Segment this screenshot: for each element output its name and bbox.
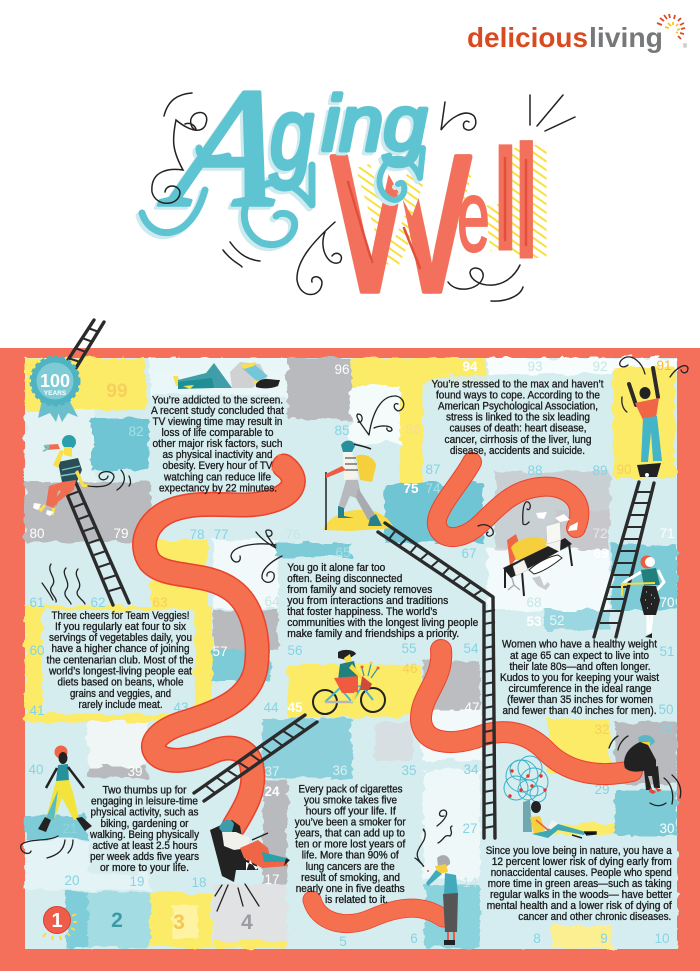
body text: leisure activity bbox=[89, 784, 199, 874]
body text: leisure activity: or more to your life. bbox=[100, 862, 189, 874]
body text: screen time: loss of life comparable to bbox=[162, 427, 274, 439]
body text: veggies: If you regularly eat four to six bbox=[55, 621, 187, 633]
space numbers: 44 bbox=[263, 700, 279, 715]
body text: veggies: servings of vegetables daily, you bbox=[49, 632, 192, 644]
swirls: lonely flourish near square 76 bbox=[231, 530, 282, 582]
swirls: wavy lines above veggies bbox=[42, 564, 85, 604]
space numbers: 37 bbox=[264, 764, 280, 779]
space numbers: 74 bbox=[425, 481, 441, 496]
logo: delicious living: living bbox=[589, 22, 663, 53]
space numbers: 61 bbox=[29, 595, 45, 610]
body text: leisure activity: per week adds five years bbox=[90, 851, 199, 863]
body text: stress: causes of death: heart disease, bbox=[450, 422, 586, 434]
space numbers: 78 bbox=[189, 527, 205, 542]
title swirls bbox=[152, 93, 575, 301]
space numbers: 21 bbox=[62, 821, 78, 836]
space numbers: 36 bbox=[332, 763, 348, 778]
title word: Well: W bbox=[331, 114, 471, 333]
space numbers: 69 bbox=[593, 546, 609, 561]
title word: Aging bbox=[142, 54, 427, 245]
body text: nature bbox=[486, 845, 673, 923]
body text: veggies: grains and veggies, and bbox=[70, 688, 171, 700]
body text: nature: regular walks in the woods— have better bbox=[490, 889, 672, 901]
space numbers bbox=[28, 358, 675, 949]
body text: going it alone: you from interactions and traditions bbox=[287, 595, 449, 607]
figure: person slumped at desk with papers bbox=[503, 512, 578, 596]
body text: stress: cancer, cirrhosis of the liver, lung bbox=[444, 434, 592, 446]
body text: going it alone bbox=[287, 562, 478, 640]
swirls: around person reaching bbox=[620, 357, 688, 412]
body text: screen time: other major risk factors, such bbox=[152, 438, 282, 450]
body text: veggies: world’s longest-living people eat bbox=[48, 666, 192, 678]
space numbers: 77 bbox=[213, 527, 229, 542]
space numbers: 85 bbox=[334, 423, 350, 438]
body text: smoking: Every pack of cigarettes bbox=[298, 784, 403, 796]
body text: veggies bbox=[46, 610, 194, 711]
space numbers: 91 bbox=[656, 358, 672, 373]
body text: stress: found ways to cope. According to the bbox=[436, 390, 600, 402]
space numbers: 17 bbox=[264, 872, 280, 887]
body text: going it alone: that foster happiness. The world’s bbox=[287, 606, 438, 618]
body text: nature: 12 percent lower risk of dying early from bbox=[492, 856, 672, 868]
space numbers: 94 bbox=[462, 359, 478, 374]
space numbers: 45 bbox=[287, 700, 303, 715]
body text: screen time: TV viewing time may result in bbox=[152, 416, 282, 428]
space numbers: 93 bbox=[527, 359, 543, 374]
body text: smoking: you’ve been a smoker for bbox=[295, 816, 406, 828]
body text: smoking: result of smoking, and bbox=[301, 872, 400, 884]
figure: woman with telescope bbox=[33, 435, 92, 516]
space numbers: 2 bbox=[111, 909, 123, 932]
space numbers: 56 bbox=[287, 643, 303, 658]
body text: leisure activity: active at least 2.5 hours bbox=[92, 840, 198, 852]
swirls: above desk bbox=[478, 502, 530, 536]
figure: sad man sitting bbox=[624, 735, 662, 794]
title word: Well: l bbox=[492, 118, 519, 281]
body text: going it alone: make family and friendships a priority. bbox=[287, 628, 459, 640]
space numbers: 96 bbox=[334, 362, 350, 377]
figure: woman reading under scribble tree bbox=[504, 756, 596, 838]
body text: leisure activity: Two thumbs up for bbox=[102, 784, 187, 796]
ladder: to 100 years bbox=[64, 320, 104, 368]
body text: nature: more time in green areas—such as taking bbox=[488, 878, 672, 890]
space numbers: 40 bbox=[28, 762, 44, 777]
swirls: below walking woman bbox=[21, 836, 73, 858]
body text: going it alone: from family and society removes bbox=[287, 584, 433, 596]
space numbers: 7 bbox=[468, 931, 476, 946]
ladder: squares 67 to 90 bbox=[594, 482, 654, 637]
swirls: smoke above old man bbox=[415, 810, 452, 866]
space numbers: 41 bbox=[29, 703, 45, 718]
body text: smoking: years, that can add up to bbox=[295, 828, 405, 840]
body text: smoking: you smoke takes five bbox=[304, 794, 397, 806]
pale text panel backings bbox=[42, 376, 676, 922]
title: Aging Well lettering bbox=[142, 54, 575, 333]
body text: waistline: (fewer than 35 inches for women bbox=[507, 694, 653, 706]
space numbers: 87 bbox=[425, 462, 441, 477]
space numbers: 50 bbox=[658, 702, 674, 717]
body text: screen time: expectancy by 22 minutes. bbox=[159, 482, 277, 494]
body text: smoking: nearly one in five deaths bbox=[296, 883, 405, 895]
logo: delicious living bbox=[467, 14, 688, 53]
space numbers: 90 bbox=[616, 462, 632, 477]
body text: screen time: You’re addicted to the screen. bbox=[152, 394, 283, 406]
space numbers: 52 bbox=[549, 613, 565, 628]
figure: woman walking with sun bbox=[38, 746, 92, 832]
body text: smoking: ten or more lost years of bbox=[295, 838, 406, 850]
body text: waistline: circumference in the ideal range bbox=[508, 683, 652, 695]
space numbers: 68 bbox=[526, 595, 542, 610]
space numbers: 30 bbox=[659, 821, 675, 836]
figure: woman with tape measure bbox=[622, 556, 664, 638]
space numbers: 6 bbox=[410, 931, 418, 946]
snake: smoking, squares 15 to 6 bbox=[312, 900, 443, 924]
body text: stress: stress is linked to the six leading bbox=[446, 412, 590, 424]
space numbers: 5 bbox=[339, 934, 347, 949]
space numbers: 54 bbox=[463, 641, 479, 656]
body text: going it alone: communities with the longest living people bbox=[287, 617, 478, 629]
body text: going it alone: often. Being disconnected bbox=[287, 573, 402, 585]
space numbers: 47 bbox=[464, 700, 480, 715]
body text: nature: mental health and a lower risk of dying of bbox=[487, 900, 673, 912]
space numbers: 53 bbox=[526, 614, 542, 629]
space numbers: 9 bbox=[600, 931, 608, 946]
swirl: wind near woman with telescope bbox=[88, 470, 130, 490]
space numbers: 3 bbox=[173, 911, 185, 934]
logo: delicious living: ® bbox=[683, 43, 688, 50]
space numbers: 35 bbox=[401, 763, 417, 778]
space numbers: 92 bbox=[592, 359, 608, 374]
body text: waistline: and fewer than 40 inches for men). bbox=[502, 705, 656, 717]
title word: Well: e bbox=[457, 159, 490, 273]
space numbers: 64 bbox=[264, 594, 280, 609]
body text: nature: Since you love being in nature, you have a bbox=[486, 845, 673, 857]
body text: veggies: the centenarian club. Most of the bbox=[46, 654, 194, 666]
title word: Aging: g bbox=[270, 79, 313, 190]
space numbers: 51 bbox=[659, 644, 675, 659]
space numbers: 63 bbox=[152, 595, 168, 610]
body text: veggies: have a higher chance of joining bbox=[52, 643, 190, 655]
figure: woman on bicycle bbox=[313, 650, 385, 714]
space numbers: 19 bbox=[129, 874, 145, 889]
ladder: long ladder from hiker down to square 27 bbox=[378, 523, 495, 838]
space numbers: 70 bbox=[659, 595, 675, 610]
swirls: around sad man bbox=[609, 736, 681, 806]
body text: smoking: lung cancers are the bbox=[306, 861, 395, 873]
body text: smoking: is related to it. bbox=[325, 894, 388, 906]
snake: waistline, squares 55 to 31 bbox=[421, 650, 632, 774]
space numbers: 57 bbox=[212, 644, 228, 659]
space numbers: 79 bbox=[113, 526, 129, 541]
title word: Aging: A bbox=[152, 54, 297, 243]
space numbers: 4 bbox=[241, 911, 253, 934]
space numbers: 62 bbox=[90, 595, 106, 610]
body text: stress: American Psychological Association, bbox=[438, 400, 598, 412]
body text: waistline bbox=[500, 638, 659, 717]
space numbers: 10 bbox=[654, 931, 670, 946]
space numbers: 18 bbox=[191, 875, 207, 890]
space numbers: 86 bbox=[405, 422, 421, 437]
space numbers: 34 bbox=[463, 762, 479, 777]
space numbers: 89 bbox=[592, 463, 608, 478]
badge: 100 years bbox=[31, 357, 79, 422]
space numbers: 72 bbox=[592, 526, 608, 541]
space numbers: 29 bbox=[594, 782, 610, 797]
space numbers: 88 bbox=[527, 463, 543, 478]
board background paint patches bbox=[25, 358, 677, 949]
badge: 100 years: YEARS bbox=[44, 390, 67, 397]
space numbers: 80 bbox=[29, 526, 45, 541]
title word: Well bbox=[331, 112, 539, 333]
space numbers: 67 bbox=[461, 546, 477, 561]
body text: screen time: A recent study concluded that bbox=[151, 405, 284, 417]
space numbers: 39 bbox=[127, 764, 143, 779]
body text: stress bbox=[432, 378, 604, 457]
space numbers: 60 bbox=[29, 643, 45, 658]
space numbers: 27 bbox=[462, 821, 478, 836]
start marker: space 1: 1 bbox=[51, 910, 63, 932]
figure: hiker on mound bbox=[323, 441, 394, 531]
logo: delicious living: delicious bbox=[467, 22, 588, 53]
space numbers: 14 bbox=[462, 875, 478, 890]
snake: screen time, squares 85 to 17 bbox=[145, 462, 293, 826]
space numbers: 46 bbox=[402, 661, 418, 676]
space numbers: 31 bbox=[659, 722, 675, 737]
motion lines: below recliner bbox=[215, 884, 259, 911]
space numbers: 55 bbox=[401, 641, 417, 656]
space numbers: 24 bbox=[264, 784, 280, 799]
figure: person lying watching screen bbox=[173, 362, 280, 389]
ladder: squares 62 to 80 bbox=[64, 483, 129, 605]
space numbers: 8 bbox=[533, 931, 541, 946]
start marker: space 1 bbox=[43, 906, 77, 940]
body text: nature: cancer and other chronic diseases. bbox=[518, 911, 671, 923]
body text: veggies: rarely include meat. bbox=[78, 699, 162, 711]
figure: old man smoking bbox=[426, 855, 458, 945]
body text: screen time bbox=[151, 394, 284, 494]
body text: stress: disease, accidents and suicide. bbox=[450, 445, 585, 457]
body text: leisure activity: engaging in leisure-time bbox=[91, 796, 198, 808]
space numbers: 75 bbox=[403, 481, 419, 496]
space numbers: 65 bbox=[335, 545, 351, 560]
body text: waistline: Women who have a healthy weight bbox=[502, 638, 657, 650]
snake: stress, squares 87 to 69 bbox=[437, 462, 579, 537]
space numbers: 82 bbox=[128, 424, 144, 439]
title word: Aging: ing bbox=[322, 79, 427, 167]
body text: screen time: obesity. Every hour of TV bbox=[162, 460, 273, 472]
body text: going it alone: You go it alone far too bbox=[287, 562, 385, 574]
space numbers: 43 bbox=[173, 700, 189, 715]
figure: person reaching on scale bbox=[629, 368, 662, 477]
swirls: above hiker bbox=[357, 396, 404, 435]
badge: 100 years: 100 bbox=[40, 371, 70, 391]
body text: screen time: as physical inactivity and bbox=[162, 449, 272, 461]
body text: leisure activity: biking, gardening or bbox=[100, 818, 189, 830]
body text: leisure activity: physical activity, such as bbox=[90, 806, 199, 818]
body text: smoking: life. More than 90% of bbox=[302, 850, 400, 862]
space numbers: 76 bbox=[285, 527, 301, 542]
space numbers: 71 bbox=[659, 526, 675, 541]
space numbers: 32 bbox=[594, 722, 610, 737]
space numbers: 20 bbox=[64, 873, 80, 888]
body text: waistline: Kudos to you for keeping your waist bbox=[500, 672, 659, 684]
game board frame bbox=[0, 348, 700, 971]
body text: leisure activity: walking. Being physically bbox=[89, 829, 199, 841]
body text: smoking: hours off your life. If bbox=[306, 806, 397, 818]
body text: veggies: diets based on beans, whole bbox=[58, 676, 184, 688]
body text: stress: You’re stressed to the max and haven’t bbox=[432, 378, 604, 390]
body text: nature: nonaccidental causes. People who spend bbox=[491, 867, 672, 879]
body text: waistline: their late 80s—and often longer. bbox=[510, 661, 650, 673]
body text: screen time: watching can reduce life bbox=[163, 472, 271, 484]
body text: waistline: at age 65 can expect to live into bbox=[510, 650, 649, 662]
body text: smoking bbox=[295, 784, 406, 906]
body text: veggies: Three cheers for Team Veggies! bbox=[52, 610, 190, 622]
ladder: squares 24 to 45 bbox=[194, 715, 317, 801]
title word: Well: l bbox=[514, 112, 539, 292]
space numbers: 99 bbox=[106, 381, 128, 402]
figure: man in recliner bbox=[210, 820, 290, 882]
